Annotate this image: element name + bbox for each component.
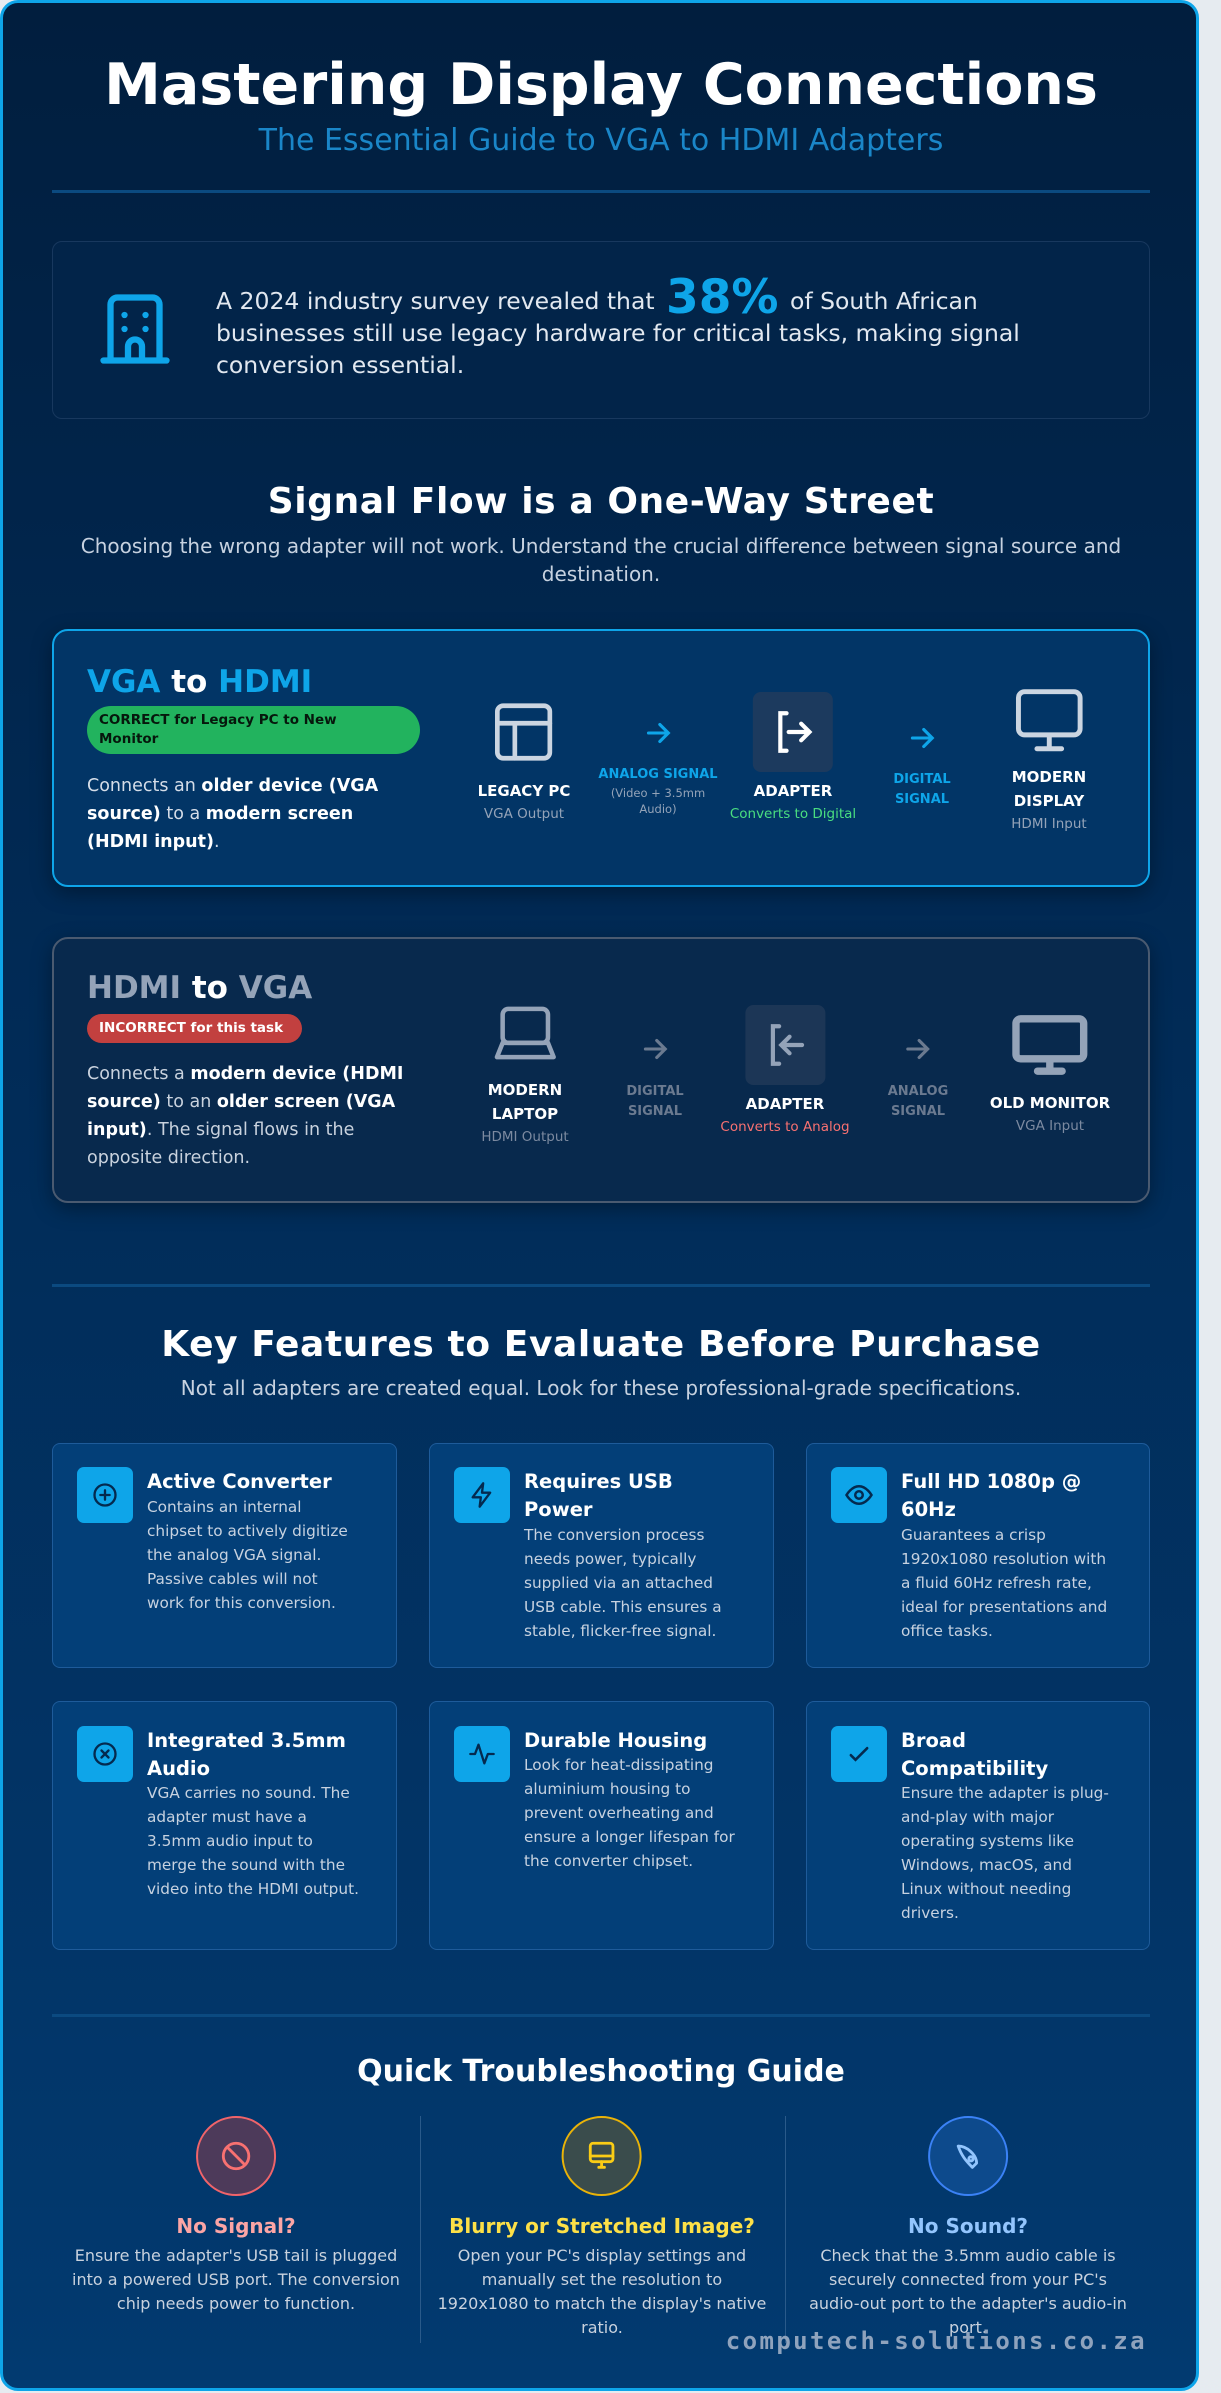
icon: plus circle xyxy=(77,1467,133,1523)
description: Connects an older device (VGA xyxy=(87,776,378,796)
flow: adapter: ADAPTER xyxy=(746,1095,824,1113)
feature: audio: adapter must have a xyxy=(147,1808,307,1826)
description xyxy=(87,1064,403,1168)
feature: housing: aluminium housing to xyxy=(524,1780,690,1798)
feature: full hd xyxy=(806,1443,1150,1668)
description: Connects a modern device (HDMI xyxy=(87,1064,403,1084)
feature: audio: Audio xyxy=(147,1757,210,1780)
panel title: VGA to HDMI xyxy=(87,664,312,700)
flow: modern display: DISPLAY xyxy=(1014,792,1084,810)
trouble: blurry: ratio. xyxy=(581,2318,623,2337)
flow: modern laptop: HDMI Output xyxy=(481,1129,569,1145)
feature: audio: Integrated 3.5mm xyxy=(147,1729,346,1752)
flow: legacy pc: VGA Output xyxy=(484,806,564,822)
trouble: no signal: into a powered USB port. The conversion xyxy=(72,2270,400,2289)
footer: website: computech-solutions.co.za xyxy=(726,2327,1147,2355)
feature: compatibility: Compatibility xyxy=(901,1757,1048,1780)
trouble: no sound: No Sound? xyxy=(908,2214,1028,2238)
signal flow subtitle: destination. xyxy=(542,562,660,586)
arrow: analog: (Video + 3.5mm xyxy=(611,786,705,800)
key features subtitle: Not all adapters are created equal. Look for these professional-grade specifications. xyxy=(181,1376,1021,1400)
flow: old monitor: OLD MONITOR xyxy=(990,1094,1110,1112)
stat text xyxy=(216,270,1020,379)
feature: usb power: supplied via an attached xyxy=(524,1574,713,1592)
flow: legacy pc xyxy=(478,703,570,822)
feature: active converter: the analog VGA signal. xyxy=(147,1546,321,1564)
feature: usb power: The conversion process xyxy=(524,1526,704,1544)
badge: incorrect xyxy=(87,1014,302,1043)
feature: active converter xyxy=(52,1443,397,1668)
feature: full hd: office tasks. xyxy=(901,1622,993,1640)
flow: adapter: ADAPTER xyxy=(754,782,832,800)
flow: adapter: Converts to Analog xyxy=(720,1119,850,1135)
description: source) to a modern screen xyxy=(87,804,353,824)
description xyxy=(87,776,378,852)
title: Mastering Display Connections xyxy=(104,52,1098,118)
icon: pulse xyxy=(454,1726,510,1782)
icon: monitor xyxy=(562,2116,642,2196)
arrow: analog: SIGNAL xyxy=(891,1104,945,1119)
flow: modern display: MODERN xyxy=(1012,768,1086,786)
trouble: no signal: Ensure the adapter's USB tail is plugged xyxy=(75,2246,397,2265)
signal flow subtitle xyxy=(81,534,1121,586)
feature: active converter: Passive cables will not xyxy=(147,1570,318,1588)
stat text: A 2024 industry survey revealed that 38% of South African xyxy=(216,270,978,325)
arrow: digital: DIGITAL xyxy=(893,772,951,787)
flow: legacy pc: LEGACY PC xyxy=(478,782,570,800)
feature: audio: video into the HDMI output. xyxy=(147,1880,359,1898)
arrow: analog xyxy=(888,1038,948,1119)
badge: correct: Monitor xyxy=(99,731,158,747)
trouble: blurry xyxy=(438,2116,766,2337)
flow: old monitor: VGA Input xyxy=(1016,1118,1084,1134)
icon: ban xyxy=(196,2116,276,2196)
description: opposite direction. xyxy=(87,1148,250,1168)
flow: modern laptop xyxy=(481,1006,569,1145)
panel: HDMI to VGA xyxy=(52,937,1150,1203)
flow: old monitor xyxy=(990,1015,1110,1134)
trouble: blurry: 1920x1080 to match the display's native xyxy=(438,2294,766,2313)
feature: audio: merge the sound with the xyxy=(147,1856,345,1874)
feature: full hd: a fluid 60Hz refresh rate, xyxy=(901,1574,1092,1592)
trouble: no sound: Check that the 3.5mm audio cable is xyxy=(820,2246,1116,2265)
trouble: no sound: securely connected from your PC's xyxy=(829,2270,1107,2289)
badge: incorrect: INCORRECT for this task xyxy=(99,1020,283,1036)
feature: compatibility: Broad xyxy=(901,1729,966,1752)
description: source) to an older screen (VGA xyxy=(87,1092,395,1112)
flow: modern display: HDMI Input xyxy=(1011,816,1087,832)
panel title: HDMI to VGA xyxy=(87,970,312,1006)
icon: x circle xyxy=(77,1726,133,1782)
feature: active converter: Active Converter xyxy=(147,1470,332,1493)
feature: compatibility: Windows, macOS, and xyxy=(901,1856,1072,1874)
feature: housing xyxy=(429,1701,774,1950)
flow: adapter: Converts to Digital xyxy=(730,806,856,822)
badge: correct: CORRECT for Legacy PC to New xyxy=(99,712,337,728)
feature: housing: the converter chipset. xyxy=(524,1852,693,1870)
feature: full hd: ideal for presentations and xyxy=(901,1598,1107,1616)
feature: active converter: chipset to actively digitize xyxy=(147,1522,348,1540)
icon: speaker xyxy=(928,2116,1008,2196)
feature: audio xyxy=(52,1701,397,1950)
arrow: digital: SIGNAL xyxy=(895,792,949,807)
arrow: digital xyxy=(893,728,951,807)
flow: modern display xyxy=(1011,689,1087,832)
icon: check xyxy=(831,1726,887,1782)
badge: correct xyxy=(87,706,420,754)
description: (HDMI input). xyxy=(87,832,220,852)
signal flow subtitle: Choosing the wrong adapter will not work. Understand the crucial difference between signal source and xyxy=(81,534,1121,558)
feature: compatibility: and-play with major xyxy=(901,1808,1054,1826)
feature: housing: Durable Housing xyxy=(524,1729,707,1752)
feature: usb power xyxy=(429,1443,774,1668)
flow: modern laptop: LAPTOP xyxy=(492,1105,558,1123)
arrow: analog: Audio) xyxy=(639,802,677,816)
feature: compatibility: operating systems like xyxy=(901,1832,1074,1850)
feature: housing: prevent overheating and xyxy=(524,1804,714,1822)
feature: active converter: Contains an internal xyxy=(147,1498,302,1516)
trouble: blurry: manually set the resolution to xyxy=(482,2270,722,2289)
trouble: no sound xyxy=(809,2116,1127,2337)
icon: building xyxy=(100,294,170,364)
feature: housing: ensure a longer lifespan for xyxy=(524,1828,735,1846)
arrow: analog xyxy=(598,722,718,816)
heading: key features: Key Features to Evaluate Before Purchase xyxy=(161,1324,1041,1365)
feature: audio: VGA carries no sound. The xyxy=(147,1784,350,1802)
feature: compatibility: Linux without needing xyxy=(901,1880,1071,1898)
feature: full hd: 1920x1080 resolution with xyxy=(901,1550,1106,1568)
trouble: blurry: Blurry or Stretched Image? xyxy=(449,2214,755,2238)
feature: full hd: Guarantees a crisp xyxy=(901,1526,1046,1544)
icon: lightning xyxy=(454,1467,510,1523)
feature: usb power: stable, flicker-free signal. xyxy=(524,1622,716,1640)
feature: compatibility xyxy=(806,1701,1150,1950)
trouble: blurry: Open your PC's display settings and xyxy=(458,2246,746,2265)
trouble: no signal: No Signal? xyxy=(176,2214,296,2238)
feature: usb power: USB cable. This ensures a xyxy=(524,1598,722,1616)
stat text: conversion essential. xyxy=(216,351,464,379)
feature: usb power: needs power, typically xyxy=(524,1550,696,1568)
trouble: no signal: chip needs power to function. xyxy=(117,2294,355,2313)
arrow: digital: DIGITAL xyxy=(626,1084,684,1099)
feature: housing: Look for heat-dissipating xyxy=(524,1756,713,1774)
feature: full hd: Full HD 1080p @ xyxy=(901,1470,1081,1493)
description: input). The signal flows in the xyxy=(87,1120,354,1140)
arrow: digital: SIGNAL xyxy=(628,1104,682,1119)
feature: usb power: Requires USB xyxy=(524,1470,673,1493)
arrow: digital xyxy=(626,1038,684,1119)
feature: audio: 3.5mm audio input to xyxy=(147,1832,313,1850)
arrow: analog: ANALOG xyxy=(888,1084,948,1099)
feature: usb power: Power xyxy=(524,1498,593,1521)
heading: troubleshooting: Quick Troubleshooting Guide xyxy=(357,2054,845,2089)
flow: adapter xyxy=(730,692,856,822)
flow: modern laptop: MODERN xyxy=(488,1081,562,1099)
trouble: no sound: port. xyxy=(949,2318,987,2337)
stat text: businesses still use legacy hardware for critical tasks, making signal xyxy=(216,319,1020,347)
flow: adapter xyxy=(720,1005,850,1135)
icon: eye xyxy=(831,1467,887,1523)
panel: VGA to HDMI xyxy=(52,629,1150,887)
feature: active converter: work for this conversion. xyxy=(147,1594,336,1612)
heading: signal flow: Signal Flow is a One-Way Street xyxy=(268,481,934,522)
subtitle: The Essential Guide to VGA to HDMI Adapters xyxy=(259,123,943,158)
feature: compatibility: Ensure the adapter is plug- xyxy=(901,1784,1109,1802)
feature: compatibility: drivers. xyxy=(901,1904,959,1922)
trouble: no signal xyxy=(72,2116,400,2313)
arrow: analog: ANALOG SIGNAL xyxy=(598,767,718,782)
feature: full hd: 60Hz xyxy=(901,1498,956,1521)
trouble: no sound: audio-out port to the adapter's audio-in xyxy=(809,2294,1127,2313)
stat box xyxy=(52,241,1150,419)
